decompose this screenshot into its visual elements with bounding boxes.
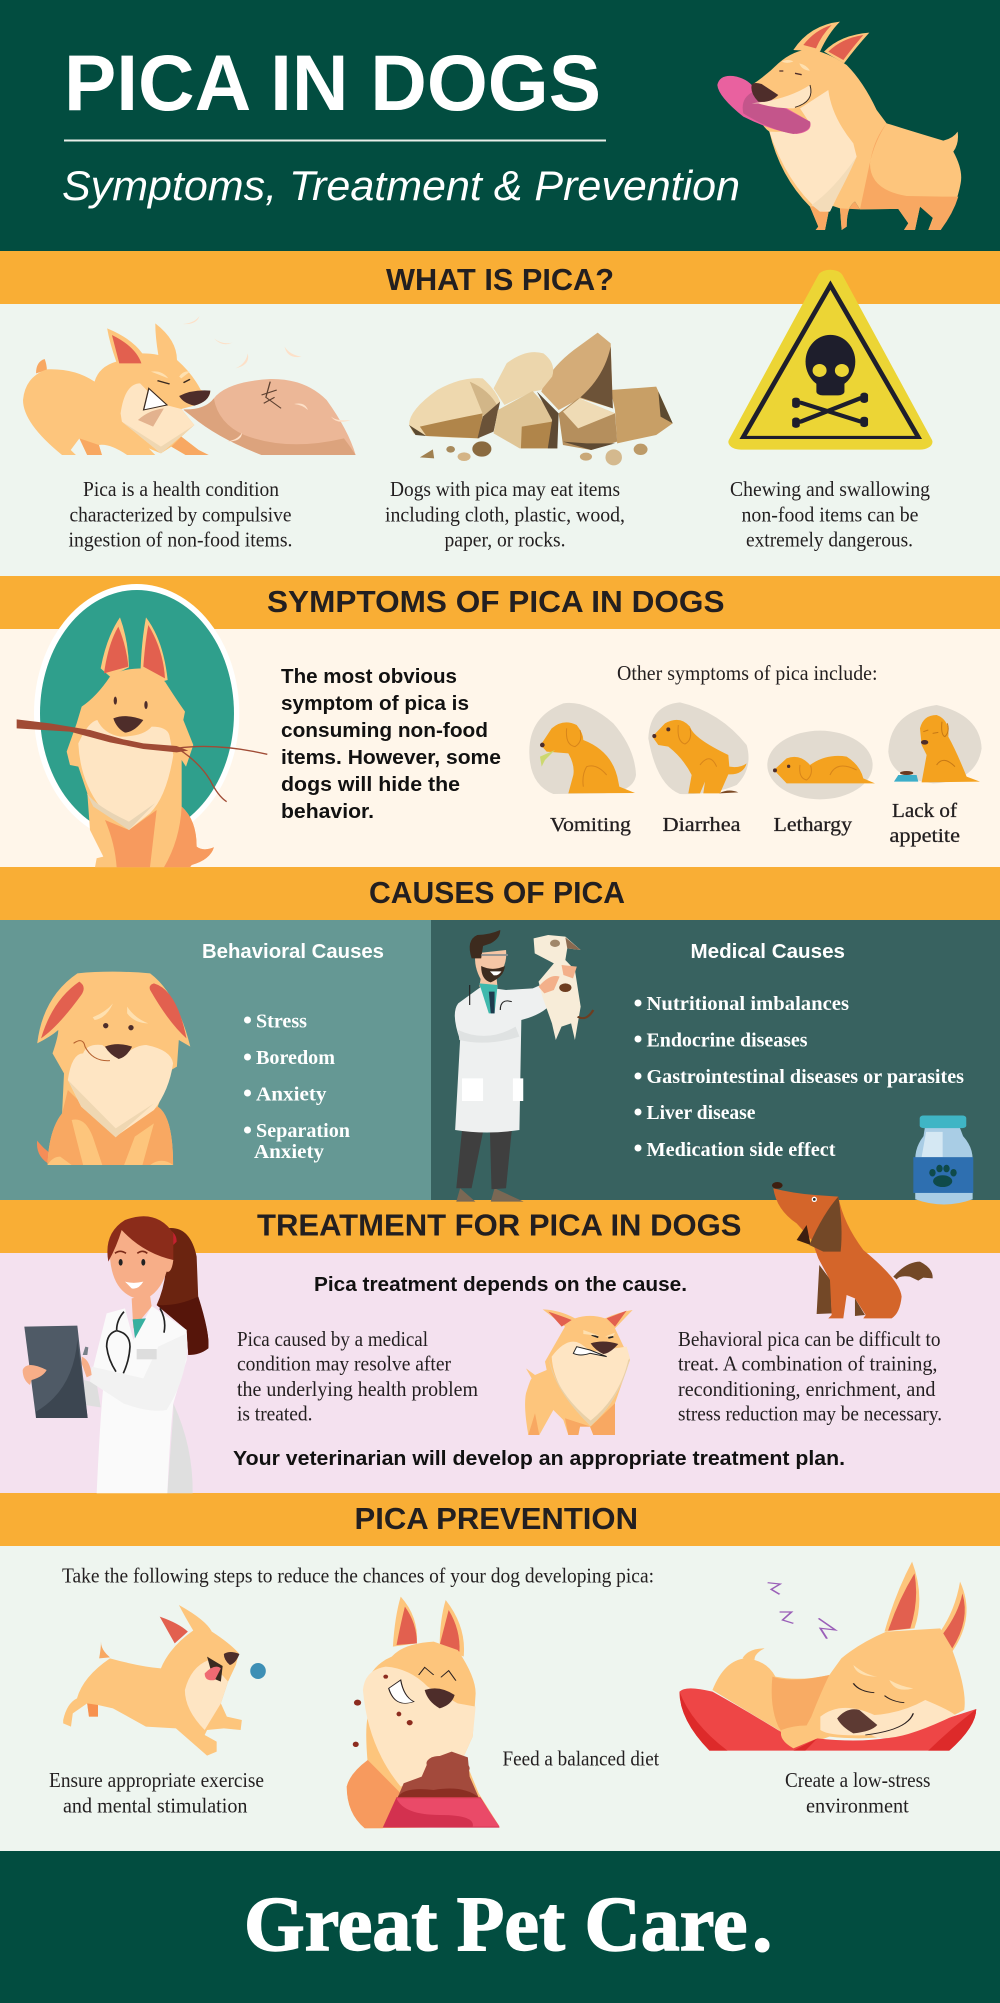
list: behavioral causes [244, 1010, 350, 1163]
illustration: dog sleeping on cushion [679, 1562, 976, 1751]
text: low-stress environment: environment [806, 1794, 909, 1818]
panel: prevention background [0, 1546, 1000, 1851]
illustration: brown dog [772, 1182, 933, 1318]
text: behavioral pica: Behavioral pica can be difficult to [678, 1327, 940, 1351]
heading: medical causes: Medical Causes [690, 940, 845, 963]
text: low-stress environment: Create a low-stress [785, 1768, 930, 1792]
icon: vomiting dog [529, 703, 636, 794]
text: low-stress environment [785, 1768, 930, 1818]
panel: header background [0, 0, 1000, 251]
text: danger warning: Chewing and swallowing [730, 477, 930, 501]
text: pica definition: characterized by compulsive [70, 502, 292, 526]
text: most obvious symptom: consuming non-food [281, 719, 488, 742]
text: balanced diet: Feed a balanced diet [502, 1746, 659, 1770]
subtitle: Symptoms, Treatment & Prevention [62, 162, 740, 209]
text: most obvious symptom: The most obvious [281, 665, 457, 688]
list: medical causes: Endocrine diseases [646, 1030, 808, 1052]
text: items dogs may eat [385, 477, 625, 552]
text: items dogs may eat: Dogs with pica may eat items [390, 477, 620, 501]
label: lack of appetite [890, 800, 960, 847]
list: medical causes: Gastrointestinal diseases or parasites [646, 1066, 964, 1088]
text: behavioral pica [678, 1327, 942, 1426]
text: items dogs may eat: paper, or rocks. [444, 528, 566, 552]
list: medical causes: Medication side effect [646, 1139, 836, 1161]
text: most obvious symptom: items. However, some [281, 746, 501, 769]
band: what is pica [0, 251, 1000, 304]
illustration: dog biting sack [23, 316, 356, 455]
text: exercise [49, 1768, 264, 1818]
panel: what is pica background [0, 303, 1000, 576]
illustration: male vet holding dog [455, 930, 593, 1202]
text: medical pica: is treated. [237, 1402, 312, 1426]
list: medical causes [634, 993, 964, 1161]
text: most obvious symptom [281, 665, 501, 823]
label: lethargy: Lethargy [774, 814, 853, 836]
label: diarrhea: Diarrhea [662, 814, 740, 836]
band: causes [0, 867, 1000, 920]
footer logo: Great Pet Care: . [751, 1872, 774, 1971]
list: behavioral causes: Anxiety [254, 1141, 324, 1163]
band: prevention [0, 1493, 1000, 1546]
text: exercise: Ensure appropriate exercise [49, 1768, 264, 1792]
label: lack of appetite: appetite [890, 825, 960, 847]
text: behavioral pica: treat. A combination of training, [678, 1352, 938, 1376]
icon: medicine bottle [913, 1115, 973, 1205]
text: medical pica: the underlying health problem [237, 1377, 478, 1401]
panel: footer background [0, 1851, 1000, 2003]
list: behavioral causes: Separation [256, 1120, 350, 1142]
illustration: dog with pink frisbee [717, 22, 961, 230]
panel: symptoms background [0, 629, 1000, 867]
text: danger warning: non-food items can be [742, 502, 918, 526]
text: pica definition: ingestion of non-food items. [68, 528, 292, 552]
text: medical pica: Pica caused by a medical [237, 1327, 428, 1351]
illustration: sad dog [37, 972, 190, 1165]
text: prevention intro: Take the following steps to reduce the chances of your dog developing pica: [62, 1564, 654, 1588]
band: symptoms [0, 576, 1000, 629]
icon: diarrhea dog [648, 702, 749, 794]
illustration: dog running after ball [63, 1605, 266, 1756]
panel: treatment background [0, 1253, 1000, 1493]
text: behavioral pica: reconditioning, enrichment, and [678, 1377, 936, 1401]
text: pica definition [68, 477, 292, 552]
icon: lethargic dog [767, 731, 875, 799]
panel: medical causes background [431, 920, 1000, 1200]
title: PICA IN DOGS [64, 38, 601, 127]
icon: dog with lack of appetite [888, 705, 982, 783]
text: items dogs may eat: including cloth, plastic, wood, [385, 502, 625, 526]
illustration: female vet with clipboard [23, 1216, 209, 1493]
text: pica definition: Pica is a health condition [83, 477, 279, 501]
text: most obvious symptom: behavior. [281, 800, 374, 823]
text: behavioral pica: stress reduction may be necessary. [678, 1402, 942, 1426]
text: treatment depends on cause: Pica treatment depends on the cause. [314, 1273, 687, 1296]
heading: behavioral causes: Behavioral Causes [202, 940, 384, 963]
list: behavioral causes: Stress [256, 1010, 307, 1032]
illustration: dog with stick in teal oval [17, 584, 267, 867]
heading: causes: CAUSES OF PICA [369, 876, 625, 910]
heading: symptoms: SYMPTOMS OF PICA IN DOGS [267, 585, 724, 619]
text: treatment plan: Your veterinarian will develop an appropriate treatment plan. [233, 1447, 845, 1470]
panel: behavioral causes background [0, 920, 431, 1200]
text: medical pica: condition may resolve after [237, 1352, 451, 1376]
label: vomiting: Vomiting [550, 814, 631, 836]
text: other symptoms intro: Other symptoms of pica include: [617, 661, 878, 685]
icon: skull warning sign [741, 277, 920, 442]
heading: treatment: TREATMENT FOR PICA IN DOGS [257, 1208, 742, 1242]
title rule [64, 140, 606, 142]
list: medical causes: Liver disease [646, 1102, 756, 1124]
text: exercise: and mental stimulation [63, 1794, 248, 1818]
text: most obvious symptom: symptom of pica is [281, 692, 469, 715]
heading: what is pica: WHAT IS PICA? [386, 263, 614, 297]
list: medical causes: Nutritional imbalances [646, 993, 849, 1015]
text: medical pica [237, 1327, 478, 1426]
band: treatment [0, 1200, 1000, 1253]
list: behavioral causes: Anxiety [256, 1084, 326, 1106]
illustration: dog eating from bowl [347, 1597, 500, 1828]
illustration: angry dog [525, 1309, 633, 1435]
footer logo: Great Pet Care: Great Pet Care [244, 1880, 748, 1967]
illustration: pile of rocks [409, 333, 673, 465]
text: danger warning [730, 477, 930, 552]
text: most obvious symptom: dogs will hide the [281, 773, 460, 796]
heading: prevention: PICA PREVENTION [354, 1502, 638, 1536]
list: behavioral causes: Boredom [256, 1047, 335, 1069]
text: danger warning: extremely dangerous. [746, 528, 913, 552]
label: lack of appetite: Lack of [892, 800, 957, 822]
